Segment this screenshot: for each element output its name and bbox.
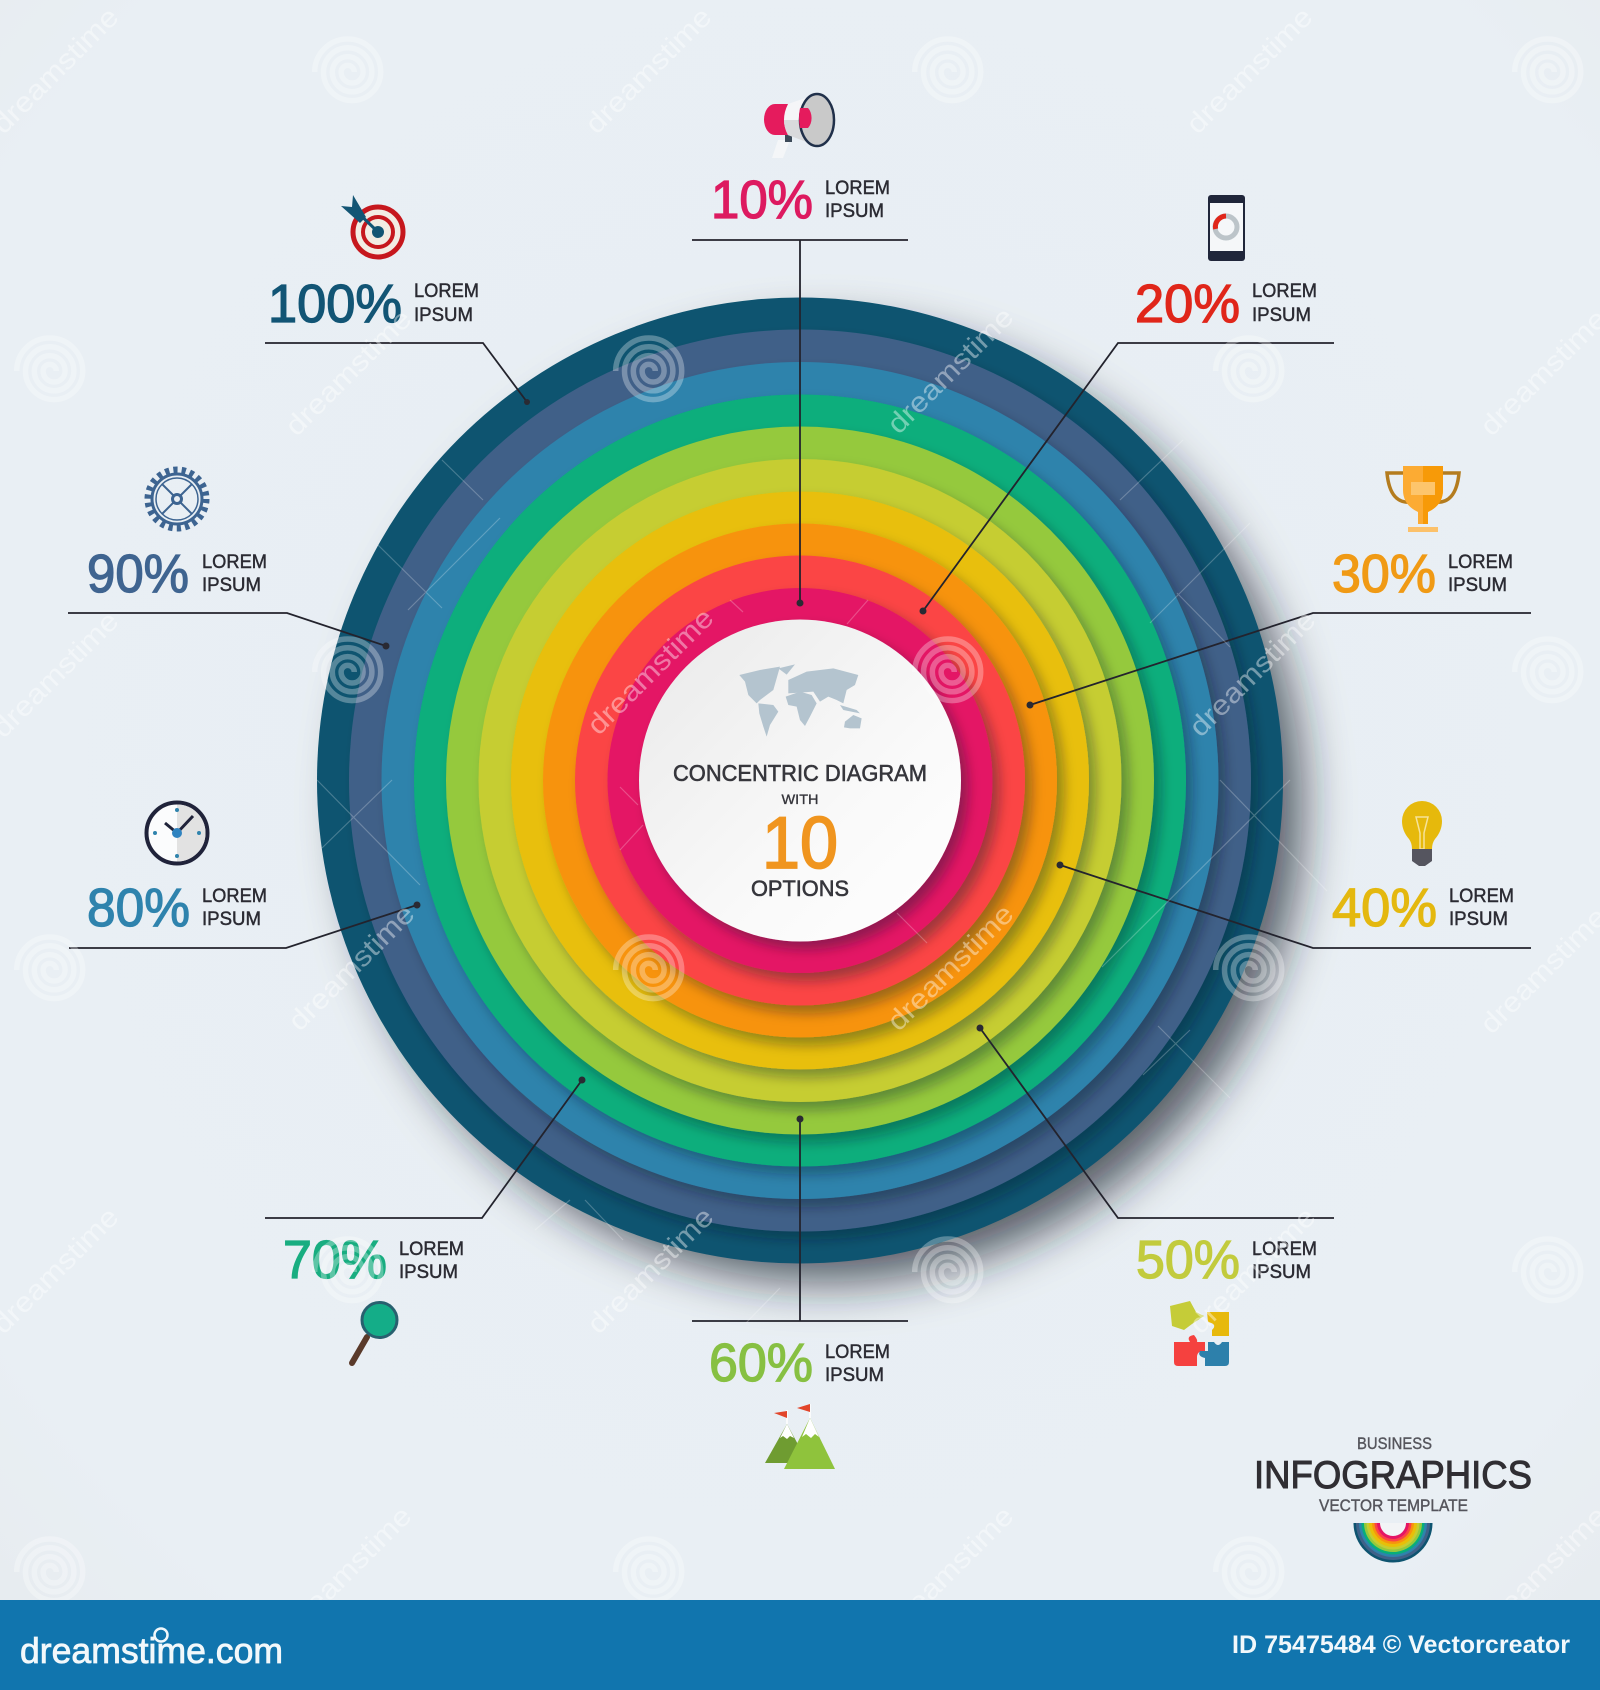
leader line	[976, 1024, 1334, 1218]
footer bar	[0, 1600, 1600, 1690]
icon: mountains	[765, 1404, 835, 1469]
ring 80%	[382, 362, 1218, 1199]
label: LOREM	[1449, 886, 1514, 907]
label: LOREM	[825, 178, 890, 199]
ring 70%	[414, 394, 1186, 1166]
leader line	[692, 1116, 908, 1321]
footer brand: dreamstime.com	[20, 1630, 283, 1671]
label: IPSUM	[1252, 1262, 1311, 1283]
concentric diagram	[317, 298, 1302, 1282]
value: 10%	[711, 170, 813, 230]
icon: gear	[148, 470, 206, 528]
value: 60%	[709, 1333, 813, 1393]
label: LOREM	[399, 1239, 464, 1260]
watermark text: dreamstime	[881, 301, 1020, 440]
leader line	[265, 343, 530, 405]
leader line	[920, 343, 1334, 614]
watermark text: dreamstime	[1474, 901, 1600, 1040]
label: LOREM	[202, 552, 267, 573]
value: 20%	[1135, 274, 1240, 334]
callout 30%	[1026, 466, 1531, 708]
label: LOREM	[1252, 281, 1317, 302]
watermark text: dreamstime	[1183, 1201, 1322, 1340]
watermark text: dreamstime	[881, 1500, 1020, 1639]
ring 40%	[511, 492, 1089, 1070]
label: LOREM	[202, 886, 267, 907]
icon: light bulb	[1402, 801, 1442, 866]
callout 100%	[265, 195, 530, 405]
icon: target	[341, 195, 403, 257]
center number: 10	[762, 803, 838, 884]
logo business: BUSINESS	[1357, 1434, 1432, 1453]
value: 90%	[87, 544, 189, 604]
value: 70%	[283, 1230, 387, 1290]
label: LOREM	[1252, 1239, 1317, 1260]
leader line	[69, 902, 420, 948]
label: IPSUM	[399, 1262, 458, 1283]
ring 50%	[478, 459, 1122, 1102]
label	[1252, 281, 1317, 326]
center plate	[639, 620, 961, 942]
callout 50%	[976, 1024, 1334, 1366]
label: IPSUM	[414, 305, 473, 326]
value: 40%	[1332, 878, 1437, 938]
callout 10%	[692, 94, 908, 606]
leader line	[265, 1076, 586, 1218]
leader line	[692, 240, 908, 606]
label: IPSUM	[202, 909, 261, 930]
watermark text: dreamstime	[881, 898, 1020, 1037]
ring 60%	[446, 426, 1154, 1134]
watermark text: dreamstime	[279, 303, 418, 442]
leader line	[1026, 613, 1531, 708]
icon: megaphone	[764, 94, 834, 158]
label: IPSUM	[1448, 575, 1507, 596]
icon: magnifier	[352, 1302, 397, 1363]
value: 100%	[268, 274, 402, 334]
label	[1448, 552, 1513, 596]
diagram cast shadow	[350, 330, 1302, 1282]
footer spiral icon	[154, 1628, 168, 1642]
watermark text: dreamstime	[282, 898, 421, 1037]
value: 50%	[1136, 1230, 1240, 1290]
ring 30%	[543, 524, 1057, 1038]
center heading: CONCENTRIC DIAGRAM	[673, 760, 927, 786]
label	[202, 886, 267, 930]
value: 30%	[1332, 544, 1436, 604]
label: LOREM	[414, 281, 479, 302]
ring 20%	[575, 556, 1025, 1006]
icon: world map	[739, 664, 862, 737]
icon: puzzle	[1170, 1301, 1229, 1366]
label: IPSUM	[1449, 909, 1508, 930]
callout 90%	[68, 470, 390, 650]
label: IPSUM	[1252, 305, 1311, 326]
watermark text: dreamstime	[1474, 303, 1600, 442]
ring 100%	[317, 298, 1283, 1264]
label	[825, 1342, 890, 1386]
center content	[673, 664, 927, 901]
label	[1252, 1239, 1317, 1283]
icon: clock	[146, 802, 208, 864]
label	[825, 178, 890, 222]
icon: trophy	[1387, 466, 1459, 532]
label: IPSUM	[825, 201, 884, 222]
center options: OPTIONS	[751, 876, 849, 901]
label	[399, 1239, 464, 1283]
callout 80%	[69, 802, 420, 948]
icon: phone	[1208, 195, 1245, 261]
ring 10%	[608, 588, 992, 973]
label: LOREM	[825, 1342, 890, 1363]
callout 60%	[692, 1116, 908, 1469]
label	[202, 552, 267, 596]
watermark text: dreamstime	[279, 1500, 418, 1639]
label	[414, 281, 479, 326]
label: IPSUM	[202, 575, 261, 596]
value: 80%	[87, 878, 190, 938]
label: IPSUM	[825, 1365, 884, 1386]
callout 70%	[265, 1076, 586, 1363]
footer credit: ID 75475484 © Vectorcreator	[1232, 1631, 1570, 1659]
label: LOREM	[1448, 552, 1513, 573]
ring 90%	[349, 330, 1251, 1232]
leader line	[1056, 862, 1531, 948]
watermark text: dreamstime	[1183, 604, 1322, 743]
label	[1449, 886, 1514, 930]
logo subtitle: VECTOR TEMPLATE	[1319, 1496, 1468, 1515]
callout 20%	[920, 195, 1334, 614]
watermark text: dreamstime	[1180, 1, 1319, 140]
center with: WITH	[782, 791, 818, 807]
watermark text: dreamstime	[581, 602, 720, 741]
leader line	[68, 613, 390, 650]
logo title: INFOGRAPHICS	[1254, 1454, 1532, 1497]
icon: mini rainbow	[1354, 1523, 1432, 1562]
logo block	[1254, 1434, 1532, 1562]
watermark text: dreamstime	[1474, 1500, 1600, 1639]
watermark text: dreamstime	[579, 1, 718, 140]
watermark text: dreamstime	[581, 1201, 720, 1340]
callout 40%	[1056, 801, 1531, 948]
